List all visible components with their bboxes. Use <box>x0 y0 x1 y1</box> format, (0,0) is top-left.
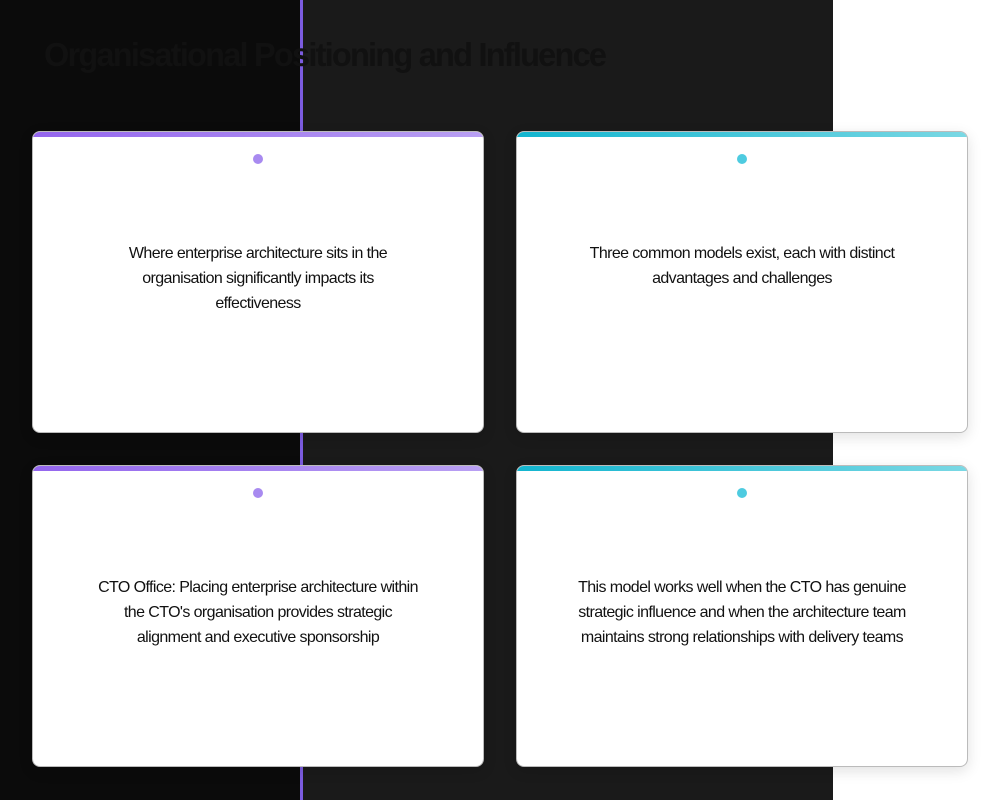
text: conditions <box>578 579 906 646</box>
text: CTO office: CTO Office: Placing enterprise architecture within <box>98 579 418 596</box>
icon: cyan dot <box>737 488 747 498</box>
text: positioning: organisation significantly impacts its <box>142 270 374 287</box>
card: CTO office <box>32 465 484 767</box>
text: models <box>590 245 895 287</box>
card: model works well <box>516 465 968 767</box>
text: conditions: This model works well when the CTO has genuine <box>578 579 906 596</box>
text: CTO office: the CTO's organisation provides strategic <box>124 604 392 621</box>
card: positioning impact <box>32 131 484 433</box>
text: positioning: Where enterprise architecture sits in the <box>129 245 387 262</box>
text: conditions: maintains strong relationships with delivery teams <box>581 629 903 646</box>
text: CTO office <box>98 579 418 646</box>
icon: purple dot <box>253 488 263 498</box>
title: Organisational Positioning and Influence <box>44 36 605 73</box>
text: positioning: effectiveness <box>215 295 301 312</box>
text: positioning <box>129 245 387 312</box>
text: conditions: strategic influence and when the architecture team <box>578 604 906 621</box>
card: three models <box>516 131 968 433</box>
text: CTO office: alignment and executive sponsorship <box>137 629 379 646</box>
text: models: Three common models exist, each with distinct <box>590 245 894 262</box>
icon: purple dot <box>253 154 263 164</box>
icon: cyan dot <box>737 154 747 164</box>
text: models: advantages and challenges <box>652 270 832 287</box>
